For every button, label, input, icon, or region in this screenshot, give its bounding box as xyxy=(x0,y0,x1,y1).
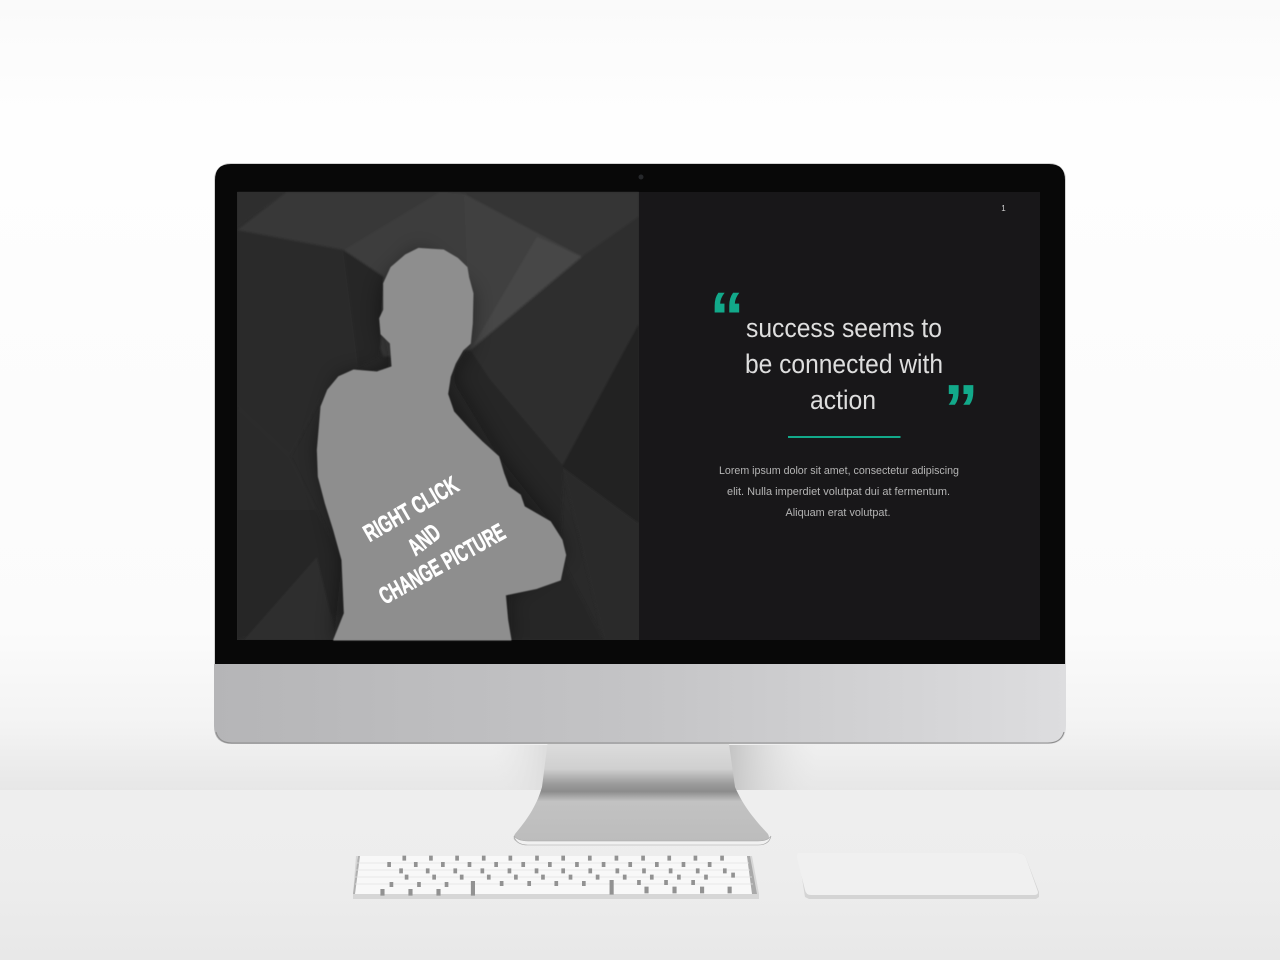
slide left panel: polygon background xyxy=(237,192,639,640)
monitor xyxy=(214,163,1066,744)
quote text xyxy=(745,313,943,415)
monitor chin bottom edge xyxy=(216,732,1064,743)
quote text: success seems to xyxy=(746,313,942,343)
monitor outer rim xyxy=(214,163,1066,703)
placeholder caption: AND xyxy=(403,519,446,561)
stand shadow on wall xyxy=(490,745,819,790)
keyboard row lines xyxy=(355,863,753,884)
keyboard key gaps xyxy=(380,856,735,896)
slide right panel xyxy=(639,192,1040,640)
trackpad xyxy=(797,853,1039,899)
body text: Lorem ipsum dolor sit amet, consectetur adipiscing xyxy=(719,465,959,477)
accent divider xyxy=(788,436,900,438)
monitor chin xyxy=(214,664,1066,744)
monitor bezel xyxy=(215,164,1065,664)
monitor stand xyxy=(514,744,771,845)
quote text: be connected with xyxy=(745,349,943,379)
quote text: action xyxy=(810,385,876,415)
body text: Aliquam erat volutpat. xyxy=(786,507,890,519)
closing quote mark: ” xyxy=(944,370,978,448)
placeholder caption: CHANGE PICTURE xyxy=(375,519,510,610)
opening quote mark: “ xyxy=(710,278,744,356)
background: desk xyxy=(0,790,1280,960)
camera xyxy=(638,174,644,180)
page number: 1 xyxy=(1001,204,1006,213)
body text: elit. Nulla imperdiet volutpat dui at fermentum. xyxy=(727,486,950,498)
body text xyxy=(719,465,959,519)
placeholder caption: RIGHT CLICK xyxy=(359,471,464,547)
placeholder caption xyxy=(359,471,510,610)
keyboard xyxy=(353,856,759,899)
silhouette shadow xyxy=(333,274,548,632)
silhouette placeholder xyxy=(317,248,566,640)
